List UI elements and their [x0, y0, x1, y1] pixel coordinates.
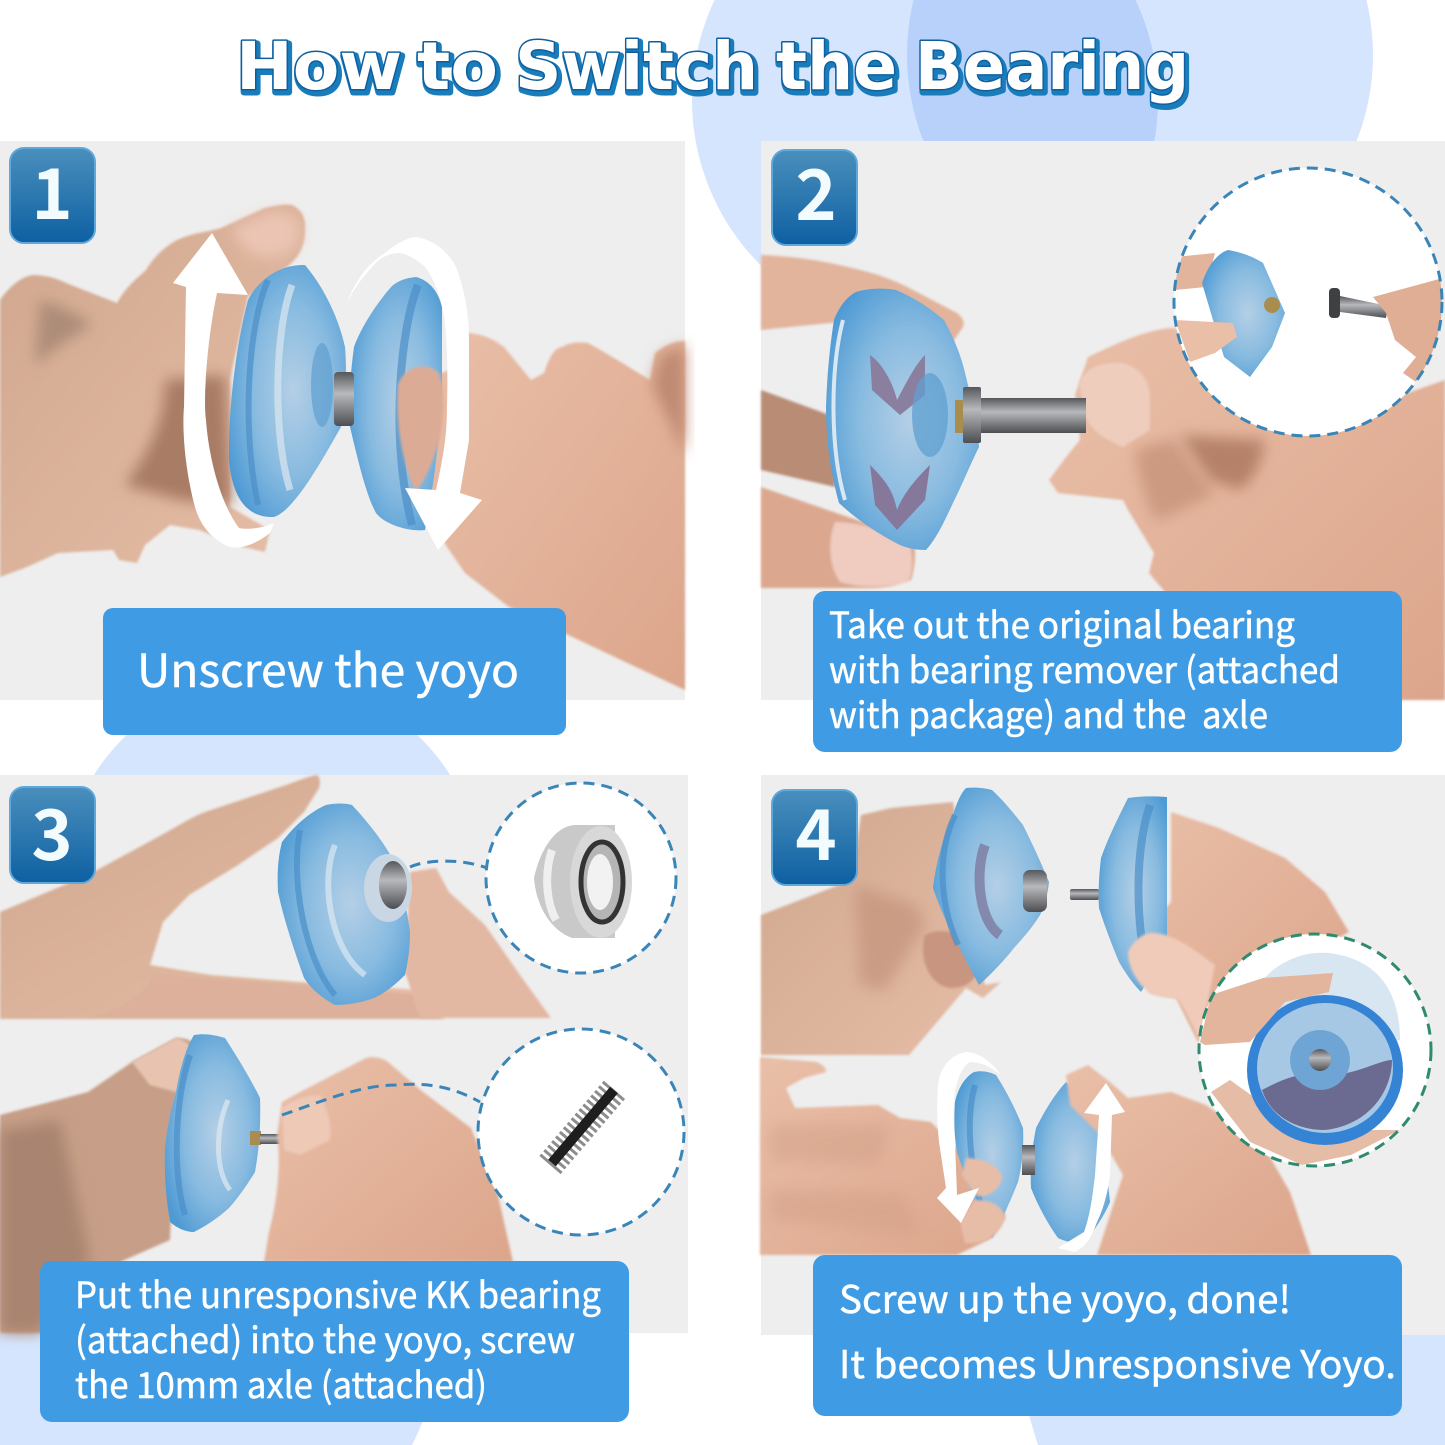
bottom yoyo halves	[954, 1071, 1110, 1243]
rotate arrow left	[937, 1052, 1001, 1223]
top yoyo	[278, 804, 410, 1005]
title: How	[238, 31, 404, 108]
knuckle shadow	[35, 300, 92, 365]
palm shadow	[125, 375, 232, 505]
yoyo half	[826, 289, 979, 550]
title: How	[236, 28, 402, 105]
bottom yoyo	[165, 1034, 280, 1232]
caption 1: Unscrew the yoyo	[137, 635, 519, 701]
bottom right hand	[1066, 1065, 1311, 1255]
panel: step 3	[0, 775, 688, 1422]
caption 3	[40, 1261, 629, 1422]
caption 3: the 10mm axle (attached)	[75, 1357, 487, 1409]
right hand	[420, 333, 685, 690]
title: Bearing	[915, 28, 1189, 105]
inset circle	[1199, 934, 1431, 1166]
panel: step 2	[761, 140, 1445, 752]
title: the	[778, 31, 899, 108]
title: the	[776, 28, 897, 105]
axle inset	[478, 1029, 684, 1235]
caption 4: It becomes Unresponsive Yoyo.	[839, 1334, 1396, 1389]
title: Bearing	[917, 31, 1191, 108]
badge 3: 3	[31, 780, 73, 881]
top hand	[0, 775, 445, 1019]
caption 4: Screw up the yoyo, done!	[839, 1269, 1291, 1324]
axle	[1022, 1145, 1035, 1175]
finger over yoyo	[397, 366, 443, 490]
caption 2	[813, 591, 1402, 752]
bottom right hand	[264, 1057, 513, 1262]
caption 3: (attached) into the yoyo, screw	[75, 1312, 575, 1364]
thumb highlight	[232, 212, 300, 258]
top yoyo right half	[1099, 796, 1167, 992]
rotate arrow left	[173, 233, 274, 547]
badge 4: 4	[795, 780, 837, 881]
badge 1	[10, 139, 95, 243]
bottom left hand	[760, 1057, 1005, 1255]
remover axle	[955, 387, 1086, 443]
bearing in yoyo	[364, 854, 412, 922]
dashed connector lines	[282, 861, 487, 1115]
inset circle	[1174, 168, 1443, 436]
left hand	[0, 205, 305, 577]
bearing inset	[486, 783, 676, 973]
caption 2: with bearing remover (attached	[829, 642, 1340, 694]
caption 3: Put the unresponsive KK bearing	[75, 1267, 601, 1319]
badge 2	[772, 140, 857, 245]
badge 2: 2	[795, 140, 837, 241]
caption 1	[103, 608, 566, 735]
title	[236, 28, 1191, 108]
badge 3	[10, 780, 95, 883]
bearing on yoyo	[1023, 870, 1047, 912]
panel: step 4	[760, 775, 1445, 1416]
top right hand	[1128, 812, 1349, 1042]
title: Switch	[515, 28, 758, 105]
caption 2: with package) and the axle	[829, 687, 1268, 739]
right hand	[1049, 328, 1445, 700]
panel: step 1	[0, 139, 685, 735]
caption 4	[813, 1255, 1402, 1416]
badge 1: 1	[31, 139, 73, 240]
bottom left hand	[0, 1038, 198, 1333]
rotate arrow right	[1058, 1083, 1125, 1252]
title: Switch	[517, 31, 760, 108]
yoyo right half	[350, 277, 442, 530]
title: to	[419, 31, 500, 108]
left fingers	[761, 255, 964, 588]
badge 4	[772, 780, 857, 885]
axle	[334, 372, 354, 426]
rotate arrow right	[347, 237, 482, 550]
fingertip over yoyo	[960, 1158, 1005, 1243]
top yoyo left half	[933, 788, 1049, 985]
caption 2: Take out the original bearing	[829, 597, 1295, 649]
top right finger	[405, 868, 551, 1018]
top left hand	[761, 802, 1001, 1055]
thumb on right half	[1128, 933, 1215, 1042]
title: to	[417, 28, 498, 105]
screw on yoyo	[1070, 889, 1099, 900]
yoyo left half	[229, 265, 346, 517]
